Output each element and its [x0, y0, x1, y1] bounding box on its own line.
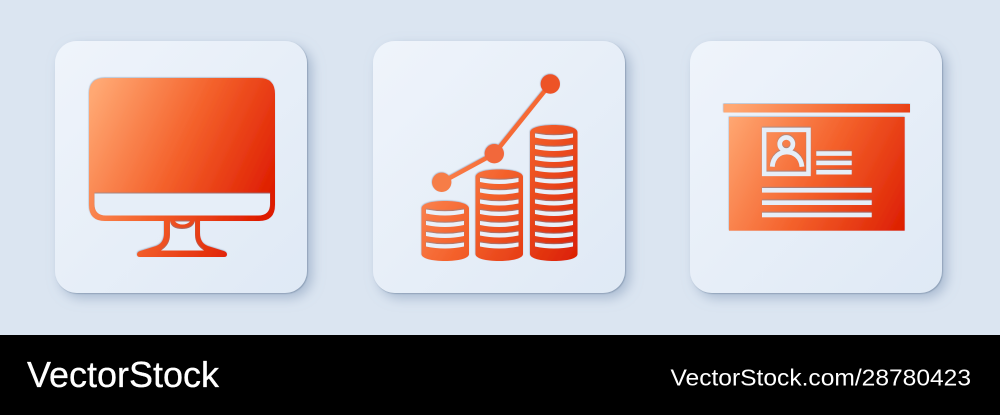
document body: [729, 117, 905, 231]
icon: coin stacks with growth line: [422, 74, 578, 261]
panel: resume card: [690, 41, 942, 293]
photo frame with person: [764, 130, 808, 174]
panel: monitor card: [55, 41, 307, 293]
icon: desktop monitor: [89, 78, 275, 257]
image reference: VectorStock.com/28780423: [670, 364, 971, 390]
coin stack 3: [530, 125, 578, 261]
text lines: [762, 151, 872, 217]
panel: coins growth card: [373, 41, 625, 293]
top bar: [724, 104, 910, 112]
coin stack 2: [476, 170, 523, 261]
icon: profile document: [724, 104, 910, 231]
brand wordmark: VectorStock: [27, 354, 220, 395]
chart line: [432, 74, 560, 192]
coin stack 1: [422, 201, 469, 261]
footer bar: [0, 335, 1000, 415]
coin stripes: [426, 134, 573, 248]
